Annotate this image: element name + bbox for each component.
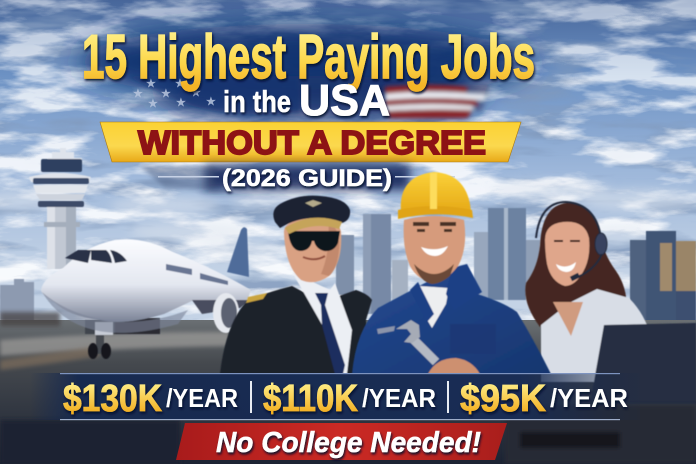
flag stars: ★ <box>133 88 143 100</box>
salary: $95K per year: $95K <box>460 378 547 420</box>
blouse <box>541 289 652 382</box>
flag stars: ★ <box>146 78 156 90</box>
airplane <box>41 227 251 359</box>
flag stars: ★ <box>161 88 171 100</box>
flag behind USA <box>127 76 490 118</box>
mechanic figure <box>352 172 551 374</box>
salary: $110K per year: /YEAR <box>362 383 436 413</box>
sky background with clouds <box>0 0 696 320</box>
salary band <box>30 373 640 420</box>
flag stars <box>133 78 216 110</box>
salary: $95K per year <box>460 378 628 420</box>
year label with side rules <box>140 165 455 192</box>
pilot cap <box>273 196 350 234</box>
salary: $130K per year: /YEAR <box>166 383 238 413</box>
yellow hard hat <box>398 172 473 219</box>
flag stars: ★ <box>176 97 186 109</box>
pilot face <box>284 218 341 282</box>
salary: $130K per year <box>63 378 238 420</box>
hand <box>428 358 480 374</box>
headset <box>536 202 607 279</box>
subtitle: in the USA <box>223 76 390 125</box>
hair <box>525 203 627 327</box>
coverall <box>352 268 551 374</box>
runway ground <box>0 312 696 464</box>
dark title backdrop <box>80 24 530 124</box>
city skyline <box>0 208 696 336</box>
wrench <box>377 320 436 362</box>
salary: $130K per year: $130K <box>63 378 162 420</box>
red banner: no college needed: No College Needed! <box>216 427 481 459</box>
banner: without a degree: WITHOUT A DEGREE <box>138 124 486 161</box>
subtitle: in the USA: in the <box>223 84 291 119</box>
airport control tower <box>29 148 91 269</box>
mechanic face <box>404 216 465 282</box>
sunglasses <box>288 231 340 251</box>
woman face <box>545 222 589 286</box>
lower figures beneath the salary band <box>0 405 696 464</box>
salary: $95K per year: /YEAR <box>550 383 628 413</box>
fuselage <box>41 239 251 322</box>
cockpit windows <box>65 250 127 263</box>
tail fin <box>227 227 249 277</box>
pilot figure <box>220 196 372 374</box>
wing and engine <box>192 300 250 314</box>
customer service woman figure <box>525 202 696 404</box>
salary: $110K per year <box>263 378 436 420</box>
pilot jacket <box>220 286 372 374</box>
epaulette <box>246 293 267 303</box>
flag stars: ★ <box>148 98 158 110</box>
shirt and tie <box>292 272 352 374</box>
cabin windows <box>166 264 228 285</box>
flag stars: ★ <box>191 87 201 99</box>
flag stars: ★ <box>206 96 216 108</box>
subtitle: in the USA: USA <box>299 76 390 125</box>
year label with side rules: (2026 GUIDE) <box>222 165 392 192</box>
laptop <box>590 323 696 404</box>
flag stars: ★ <box>175 78 185 90</box>
landing gear <box>85 320 115 359</box>
salary: $110K per year: $110K <box>263 378 358 420</box>
